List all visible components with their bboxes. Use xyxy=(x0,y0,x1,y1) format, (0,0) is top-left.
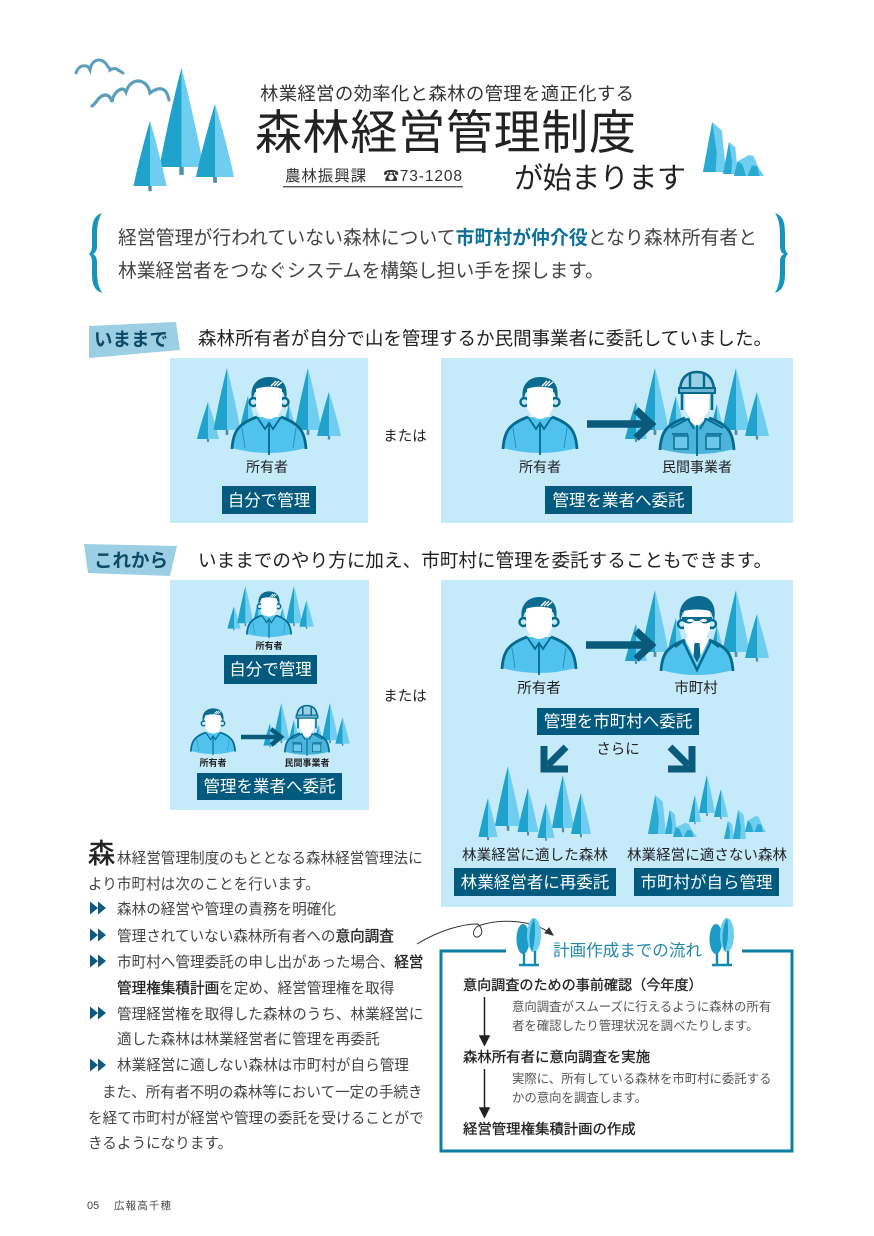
arrow: to unsuitable forest xyxy=(668,746,692,769)
text block: law explanation: 森林の経営や管理の責務を明確化 xyxy=(117,900,336,918)
section tag: いままで xyxy=(89,322,180,358)
panel: municipality delegation: 管理を市町村へ委託 xyxy=(544,712,692,731)
panel: existing options (after) xyxy=(170,580,369,810)
text block: law explanation: 管理経営権を取得した森林のうち、林業経営に xyxy=(117,1005,423,1023)
icon: header rocks xyxy=(703,122,764,176)
panel: planning flow: 実際に、所有している森林を市町村に委託する xyxy=(512,1071,771,1086)
panel: municipality delegation: 林業経営に適さない森林 xyxy=(627,847,788,864)
footer: 05 xyxy=(87,1200,99,1212)
panel: planning flow: 意向調査がスムーズに行えるように森林の所有 xyxy=(512,999,771,1014)
arrow: to suitable forest xyxy=(544,746,568,769)
intro callout: 経営管理が行われていない森林について市町村が仲介役となり森林所有者と xyxy=(118,226,757,248)
panel: self management (before): 自分で管理 xyxy=(228,491,310,510)
panel: existing options (after): 自分で管理 xyxy=(229,660,312,679)
panel: existing options (after): 所有者 xyxy=(199,757,227,768)
section heading: これから: いままでのやり方に加え、市町村に管理を委託することもできます。 xyxy=(198,550,772,571)
icon: unsuitable forest xyxy=(648,775,766,839)
panel: municipality delegation xyxy=(441,580,793,907)
icon: flow trees right xyxy=(710,918,734,965)
text block: law explanation: 適した森林は林業経営者に管理を再委託 xyxy=(117,1030,380,1048)
intro callout: 林業経営者をつなぐシステムを構築し担い手を探します。 xyxy=(118,260,604,281)
panel: planning flow: 者を確認したり管理状況を調べたりします。 xyxy=(512,1018,759,1033)
text block: law explanation: より市町村は次のことを行います。 xyxy=(88,876,320,893)
text block: law explanation: 管理権集積計画を定め、経営管理権を取得 xyxy=(117,979,394,997)
text block: law explanation: 森 xyxy=(88,839,115,869)
panel: municipality delegation: 林業経営に適した森林 xyxy=(462,847,608,864)
text block: law explanation: きるようになります。 xyxy=(88,1135,232,1152)
text block: law explanation: を経て市町村が経営や管理の委託を受けることがで xyxy=(88,1109,424,1127)
panel: planning flow: 森林所有者に意向調査を実施 xyxy=(463,1049,650,1066)
panel: self management (before): 所有者 xyxy=(246,459,288,475)
arrow: step 2 to 3 xyxy=(480,1069,489,1117)
label: または (before): または xyxy=(383,428,427,445)
section tag: これから: これから xyxy=(94,550,168,571)
arrow: owner to contractor xyxy=(587,410,651,438)
title: 森林経営管理制度 xyxy=(255,106,636,159)
text block: law explanation: 市町村へ管理委託の申し出があった場合、経営 xyxy=(117,953,424,971)
department and phone: 農林振興課 ☎73-1208 xyxy=(285,167,462,185)
label: または (after): または xyxy=(383,688,427,705)
text block: law explanation: 林業経営に適しない森林は市町村が自ら管理 xyxy=(117,1056,409,1074)
icon: header trees xyxy=(134,68,234,191)
arrow: owner to municipality xyxy=(586,631,651,659)
intro callout xyxy=(89,213,788,293)
panel: contractor (before): 管理を業者へ委託 xyxy=(552,491,684,510)
panel: existing options (after): 所有者 xyxy=(255,640,283,651)
text block: law explanation: また、所有者不明の森林等において一定の手続き xyxy=(102,1083,423,1101)
text block: law explanation: 林経営管理制度のもととなる森林経営管理法に xyxy=(117,849,423,867)
panel: municipality delegation: 所有者 xyxy=(517,680,561,697)
section tag: これから xyxy=(84,544,177,576)
panel: municipality delegation: 市町村 xyxy=(674,680,718,697)
panel: contractor (before): 所有者 xyxy=(519,459,561,475)
section heading: いままで: 森林所有者が自分で山を管理するか民間事業者に委託していました。 xyxy=(198,328,772,349)
panel: planning flow xyxy=(441,918,792,1151)
section tag: いままで: いままで xyxy=(94,329,168,350)
panel: planning flow: かの意向を調査します。 xyxy=(512,1090,647,1105)
panel: municipality delegation: 林業経営者に再委託 xyxy=(461,873,609,892)
arrow: step 1 to 2 xyxy=(480,997,489,1045)
panel: contractor (before) xyxy=(441,358,793,523)
footer xyxy=(87,1199,172,1212)
title suffix: が始まります xyxy=(514,162,686,195)
text block: law explanation xyxy=(88,839,424,1152)
panel: planning flow: 計画作成までの流れ xyxy=(553,941,702,960)
panel: municipality delegation: 市町村が自ら管理 xyxy=(640,873,772,892)
icon: flow trees xyxy=(516,918,541,965)
panel: planning flow: 経営管理権集積計画の作成 xyxy=(463,1121,636,1138)
icon: clouds xyxy=(76,60,169,106)
arrow: curved pointer to flow xyxy=(417,921,553,944)
panel: municipality delegation: さらに xyxy=(596,741,640,758)
panel: contractor (before): 民間事業者 xyxy=(662,459,732,475)
panel: self management (before) xyxy=(170,358,368,523)
footer: 広報高千穂 xyxy=(114,1199,172,1212)
subtitle: 林業経営の効率化と森林の管理を適正化する xyxy=(260,83,634,104)
panel: existing options (after): 民間事業者 xyxy=(284,757,330,768)
icon: suitable forest xyxy=(478,766,591,841)
panel: planning flow: 意向調査のための事前確認（今年度） xyxy=(463,977,703,993)
panel: existing options (after): 管理を業者へ委託 xyxy=(204,777,336,796)
text block: law explanation: 管理されていない森林所有者への意向調査 xyxy=(117,927,394,945)
